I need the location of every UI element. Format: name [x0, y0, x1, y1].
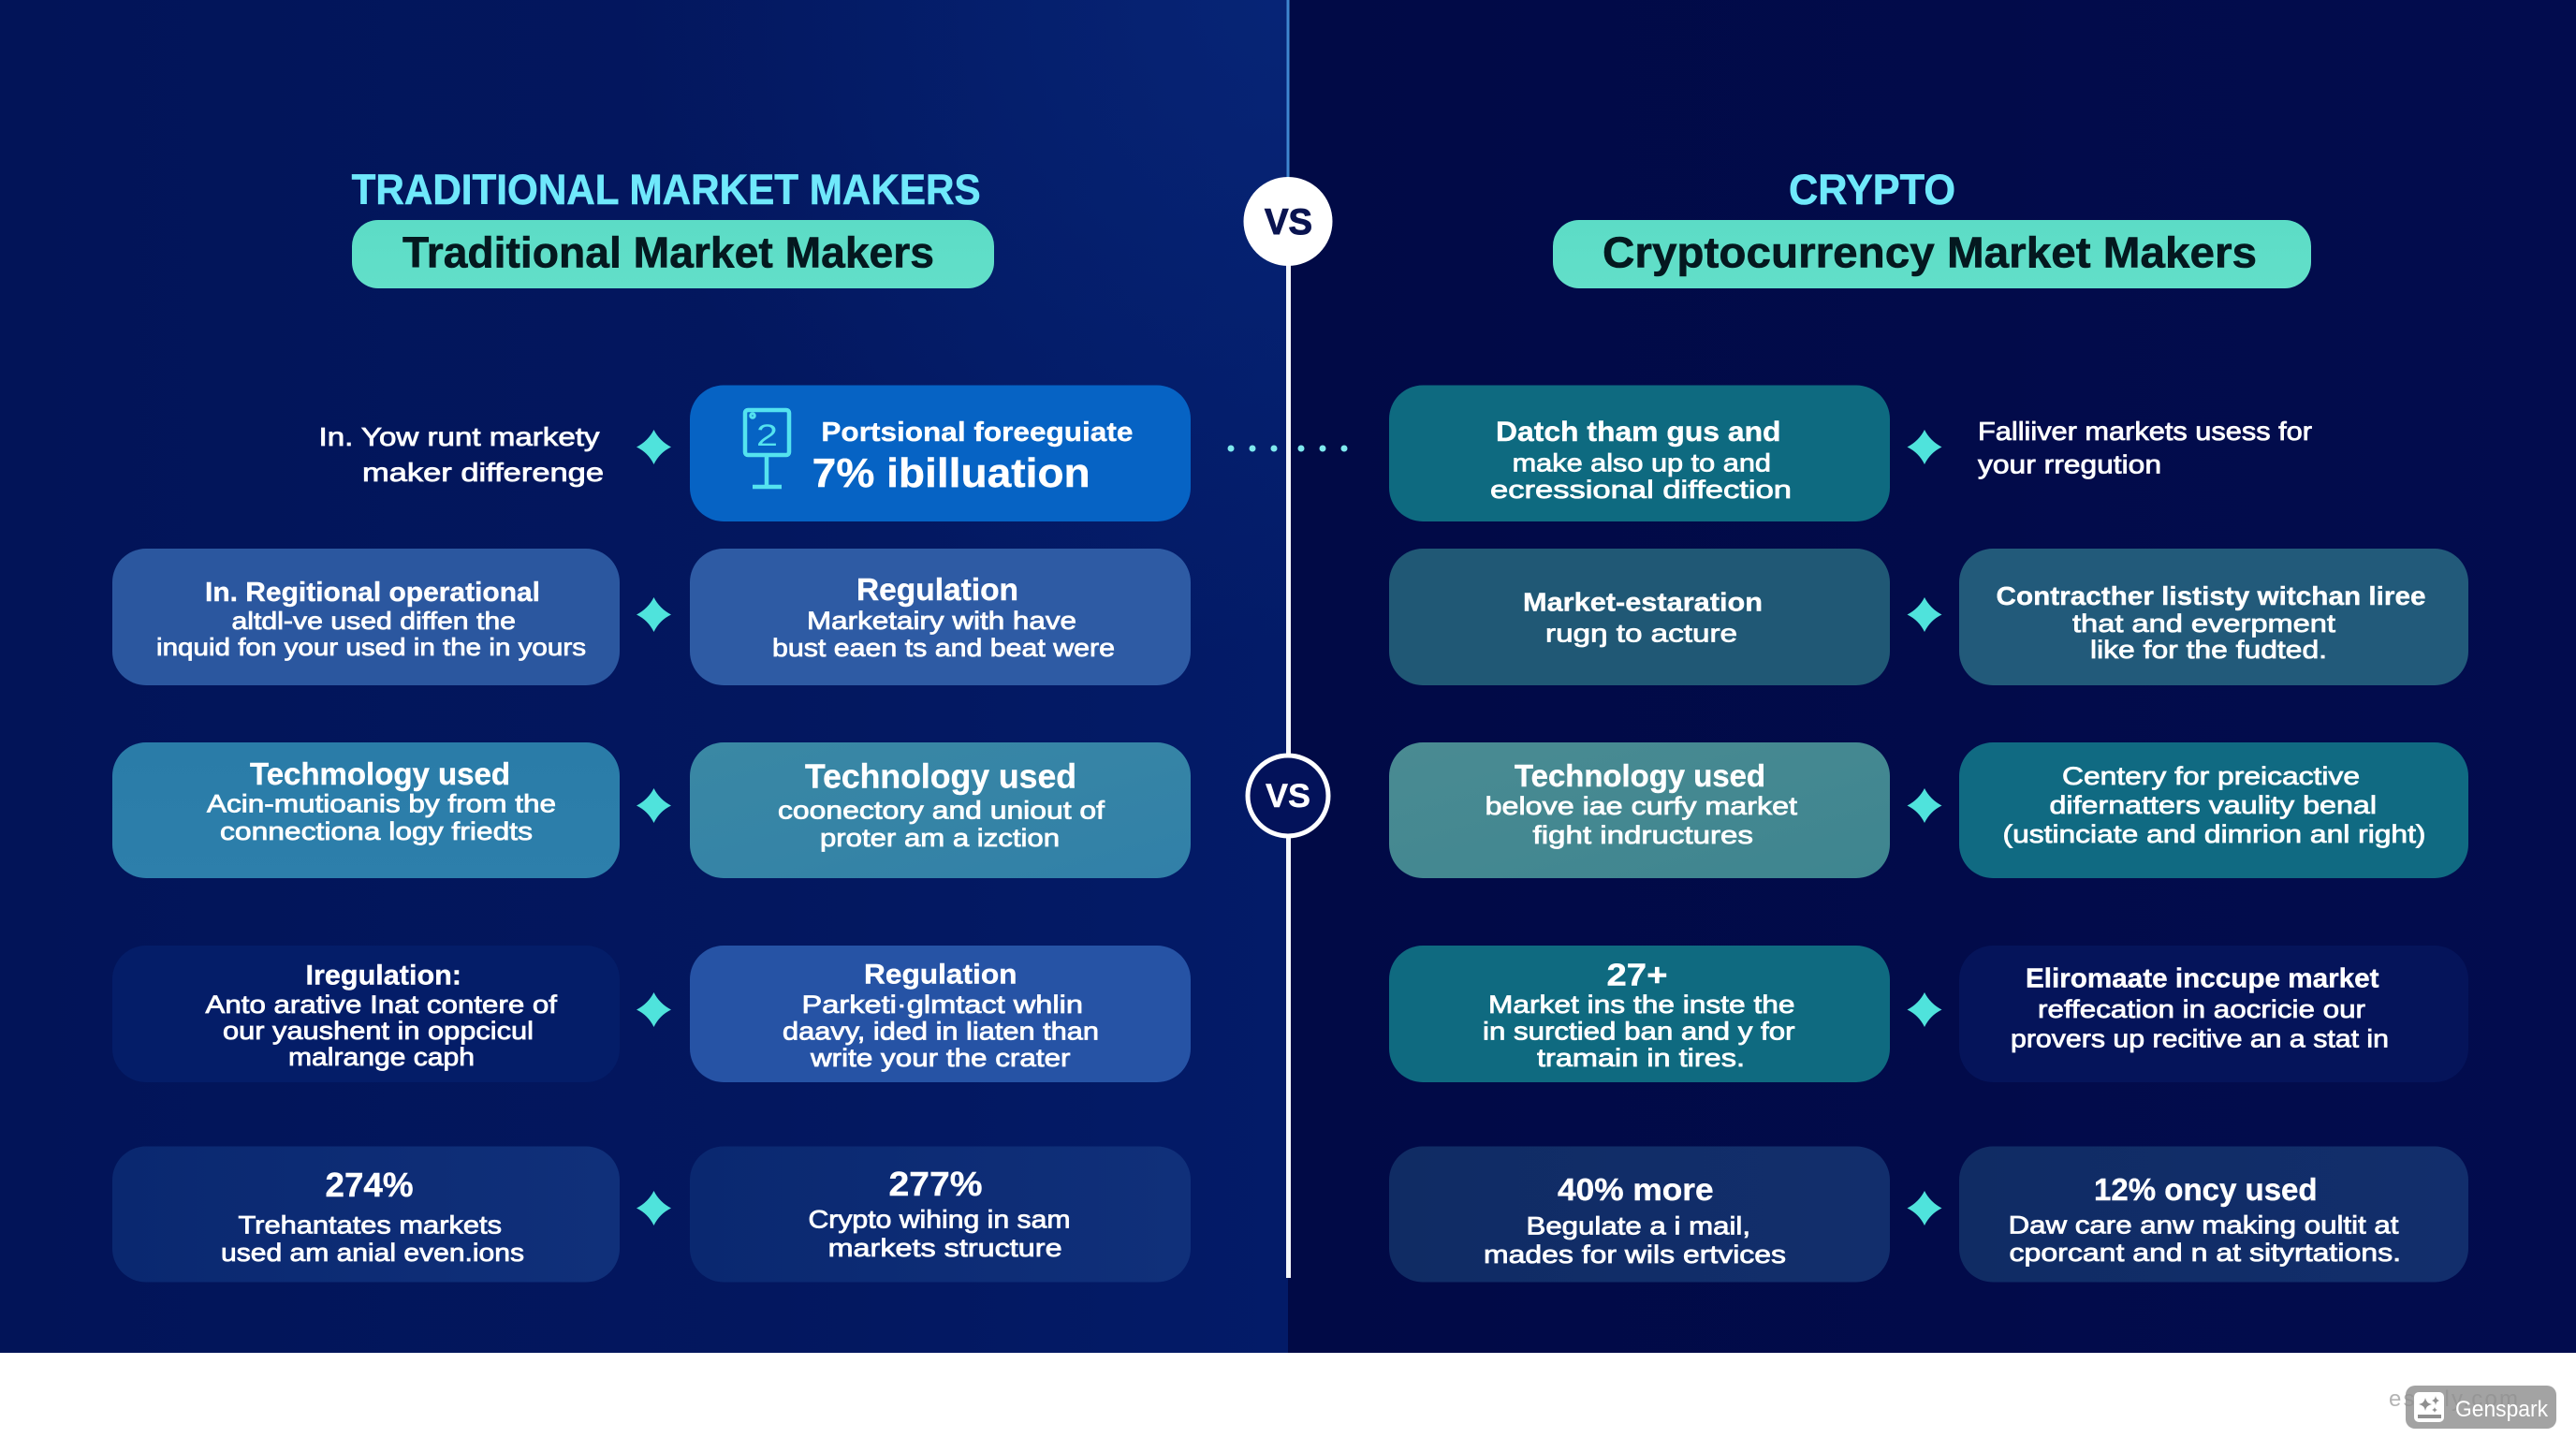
card text: Acin-mutioanis by from the [207, 789, 556, 817]
card text: 40% more [1558, 1172, 1714, 1207]
icon: diamond row 5 right [1908, 1191, 1941, 1225]
card: row 3 left inner [690, 742, 1191, 878]
card: row 1 datch [1389, 386, 1890, 521]
card text: inquid fon your used in the in yours [156, 633, 586, 661]
icon: diamond row 2 left [637, 597, 671, 632]
card text: like for the fudted. [2090, 636, 2327, 664]
row 1 left text: In. Yow runt markety [318, 422, 599, 451]
center divider line [1286, 0, 1291, 1278]
icon: numbered sign: 2 [756, 418, 778, 452]
card text: Crypto wihing in sam [809, 1206, 1071, 1234]
card text: proter am a izction [820, 824, 1060, 852]
background: right panel [1288, 0, 2576, 1353]
card text: Anto arative Inat contere of [206, 990, 558, 1019]
card text: mades for wils ertvices [1484, 1240, 1786, 1269]
card text [772, 572, 1115, 662]
row 1 left text: maker differenge [362, 458, 604, 487]
card text [156, 578, 586, 661]
card: row 2 right outer [1959, 549, 2468, 685]
icon: diamond row 1 right [1908, 430, 1941, 464]
title: traditional: TRADITIONAL MARKET MAKERS [352, 166, 981, 213]
icon: diamond row 4 right [1908, 992, 1941, 1027]
card: row 4 right outer [1959, 946, 2468, 1082]
card text: difernatters vaulity benal [2050, 791, 2377, 819]
card: row 2 left inner [690, 549, 1191, 685]
card text: markets structure [828, 1234, 1062, 1262]
card: row 5 right outer [1959, 1146, 2468, 1283]
card text: altdl-ve used diffen the [232, 607, 516, 635]
card text: Contracther lististy witchan liree [1996, 581, 2426, 610]
card text [1483, 957, 1795, 1072]
card text: malrange caph [288, 1043, 475, 1071]
VS badge: middle: VS [1266, 778, 1310, 814]
VS badge: top: VS [1265, 202, 1312, 242]
card text [2009, 1172, 2401, 1267]
card text: ecressional diffection [1490, 476, 1792, 504]
card text [1486, 758, 1798, 849]
icon: diamond row 4 left [637, 992, 671, 1027]
card: row 1 portsional [690, 386, 1191, 521]
card text: connectiona logy friedts [220, 817, 533, 845]
card text: our yaushent in oppcicul [223, 1017, 534, 1045]
dotted connector [1228, 446, 1348, 451]
watermark: Genspark: Genspark [2455, 1397, 2549, 1422]
card text [221, 1166, 524, 1267]
card text: Portsional foreeguiate [821, 418, 1133, 448]
card text: tramain in tires. [1537, 1044, 1745, 1072]
card text: Technology used [805, 757, 1076, 796]
card text: make also up to and [1513, 449, 1771, 477]
card text: in surctied ban and y for [1483, 1018, 1795, 1046]
card: row 2 left outer [112, 549, 620, 685]
icon: numbered sign [745, 410, 789, 487]
row 1 right text: Falliiver markets usess for [1978, 417, 2312, 446]
icon: diamond row 5 left [637, 1191, 671, 1225]
card: row 5 left outer [112, 1146, 620, 1283]
card text [2003, 762, 2426, 848]
icon: diamond row 1 left [637, 430, 671, 464]
card text: write your the crater [810, 1044, 1071, 1072]
VS badge: middle [1248, 756, 1328, 836]
row 1 right text: your rregution [1978, 450, 2161, 479]
card: row 4 left inner [690, 946, 1191, 1082]
card text: bust eaen ts and beat were [772, 634, 1115, 662]
card text: belove iae curfy market [1486, 792, 1798, 820]
card text: used am anial even.ions [221, 1239, 524, 1267]
card text: Begulate a i mail, [1526, 1212, 1750, 1240]
card text: Datch tham gus and [1496, 417, 1780, 448]
card: row 3 right outer [1959, 742, 2468, 878]
card text [207, 756, 556, 845]
icon: diamond row 3 left [637, 788, 671, 823]
pill: crypto [1553, 220, 2311, 288]
card: row 5 right inner [1389, 1146, 1890, 1283]
pill: traditional: Traditional Market Makers [402, 227, 934, 276]
card text: Techmology used [250, 756, 510, 791]
card text: cporcant and n at sityrtations. [2009, 1239, 2401, 1267]
card text: Iregulation: [305, 961, 461, 991]
heading: traditional column [352, 166, 994, 288]
card: row 3 right inner [1389, 742, 1890, 878]
card text [778, 757, 1105, 852]
card text: Regulation [856, 572, 1018, 607]
card text: rugŋ to acture [1545, 620, 1737, 648]
card text: Marketairy with have [807, 607, 1076, 635]
card text: 274% [326, 1166, 414, 1204]
card text: 27+ [1606, 957, 1668, 992]
card text: that and everpment [2072, 609, 2336, 638]
card text: reffecation in aocricie our [2038, 995, 2365, 1023]
icon: diamond row 2 right [1908, 597, 1941, 632]
card: row 2 right inner [1389, 549, 1890, 685]
card: row 4 right inner [1389, 946, 1890, 1082]
card text: fight indructures [1533, 821, 1753, 849]
title: crypto: CRYPTO [1789, 166, 1955, 213]
card text: daavy, ided in liaten than [783, 1018, 1099, 1046]
card text [1996, 581, 2426, 664]
footer faint text: essaly.com [2389, 1387, 2518, 1412]
card text: coonectory and uniout of [778, 796, 1105, 824]
card text [809, 1165, 1071, 1262]
card text: Trehantates markets [238, 1211, 502, 1239]
row 1 left text [318, 422, 604, 487]
pill: traditional [352, 220, 994, 288]
watermark: Genspark [2406, 1386, 2556, 1429]
card text [812, 418, 1133, 496]
card text: Market ins the inste the [1488, 990, 1795, 1019]
card text [206, 961, 558, 1071]
card text [1523, 588, 1763, 648]
card text: Daw care anw making oultit at [2009, 1211, 2399, 1239]
card text [1484, 1172, 1786, 1269]
card text: 277% [889, 1165, 983, 1203]
card text: Parketi·glmtact whlin [801, 990, 1083, 1019]
card text: Centery for preicactive [2062, 762, 2360, 790]
card text [1490, 417, 1792, 504]
heading: crypto column [1553, 166, 2311, 288]
card text: Market-estaration [1523, 588, 1763, 617]
VS badge: top [1243, 177, 1333, 266]
card text [783, 959, 1099, 1072]
card text: Eliromaate inccupe market [2026, 964, 2379, 994]
card text: 12% oncy used [2094, 1172, 2318, 1207]
card text [2011, 964, 2389, 1052]
row 1 right text [1978, 417, 2312, 479]
icon: diamond row 3 right [1908, 788, 1941, 823]
card text: Technology used [1515, 758, 1765, 793]
card text: (ustinciate and dimrion anl right) [2003, 820, 2426, 848]
card text: 7% ibilluation [812, 450, 1090, 496]
card: row 5 left inner [690, 1146, 1191, 1283]
background: left panel [0, 0, 1288, 1353]
card: row 3 left outer [112, 742, 620, 878]
card text: Regulation [864, 959, 1017, 990]
pill: crypto: Cryptocurrency Market Makers [1603, 227, 2257, 276]
card text: provers up recitive an a stat in [2011, 1024, 2389, 1052]
card text: In. Regitional operational [205, 578, 540, 608]
card: row 4 left outer [112, 946, 620, 1082]
